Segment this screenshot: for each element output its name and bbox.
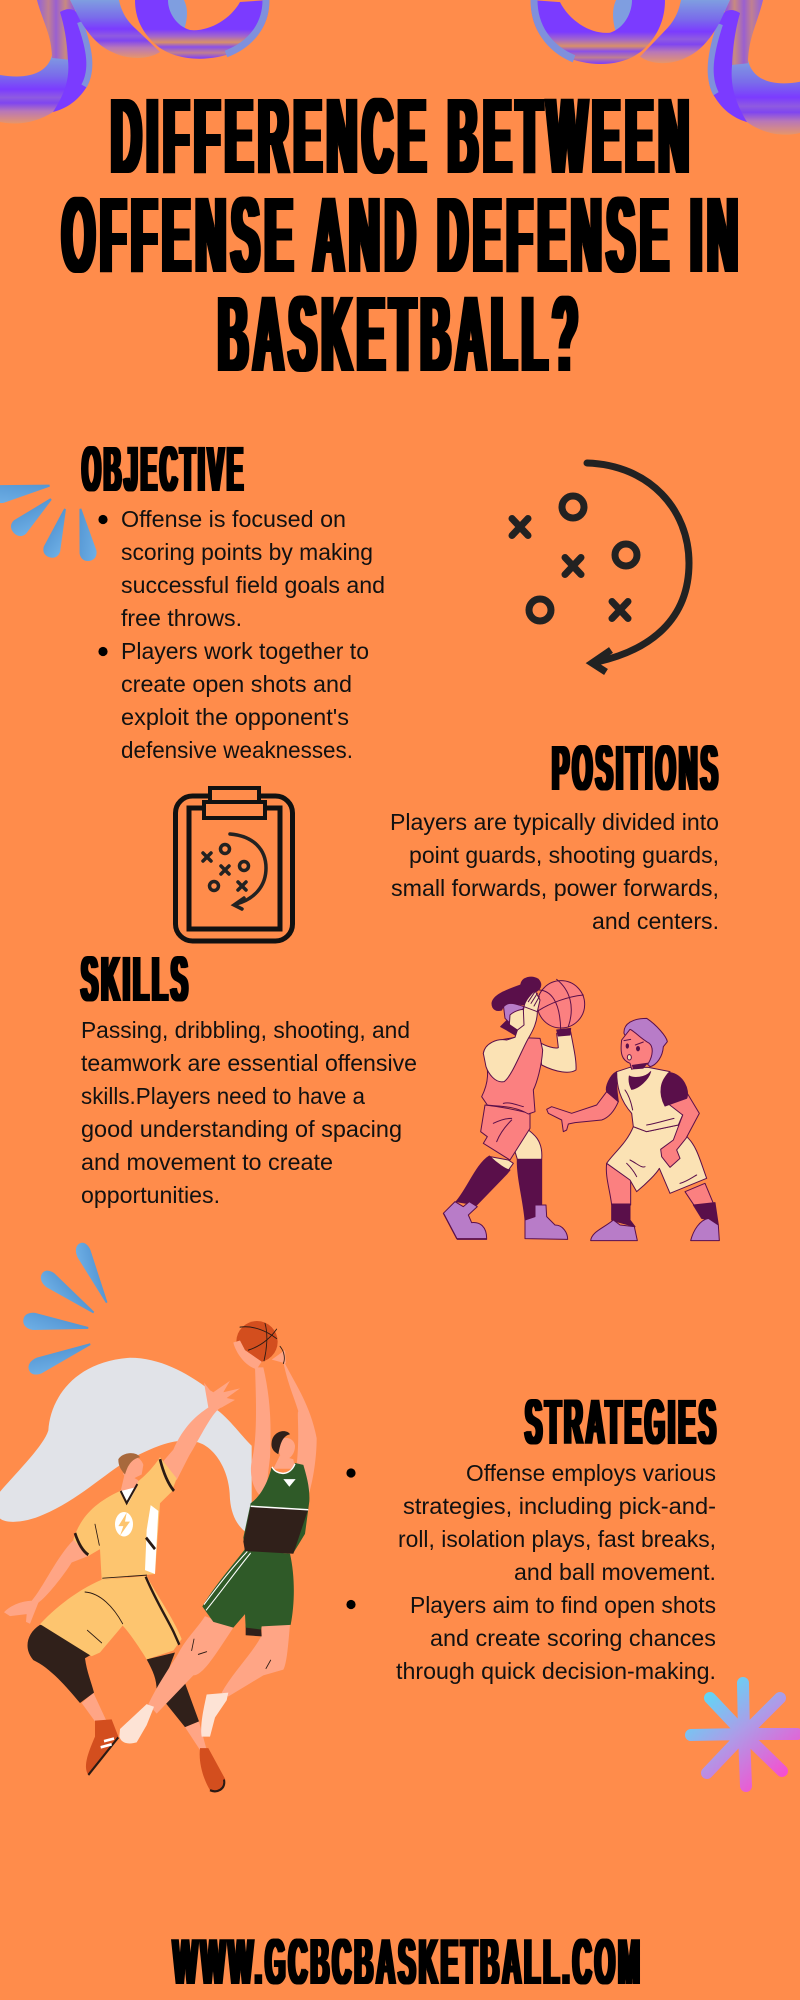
text: strategies bullets: Players aim to find open shots: [410, 1592, 716, 1618]
text: positions: Players are typically divided into: [390, 809, 719, 835]
icon: gradient asterisk: [691, 1683, 797, 1786]
green player: [119, 1321, 317, 1743]
icon: clipboard: [176, 788, 292, 941]
icon: blue rays upper left of dunk scene: [23, 1240, 113, 1378]
shorts and shirt: [481, 1037, 543, 1160]
grey blob: [0, 1358, 252, 1536]
yellow player: [4, 1381, 240, 1792]
text: positions: [390, 809, 719, 934]
text: strategies bullets: strategies, including pick-and-: [403, 1493, 716, 1519]
icon: play diagram: [512, 463, 689, 672]
text: strategies bullets: through quick decision-making.: [396, 1658, 716, 1684]
text: skills: opportunities.: [81, 1182, 220, 1208]
text: objective bullets: defensive weaknesses.: [121, 737, 353, 763]
text: skills: [81, 1017, 417, 1208]
front arm and head: [483, 977, 541, 1082]
text: skills: teamwork are essential offensive: [81, 1050, 417, 1076]
text: objective bullets: scoring points by making: [121, 539, 373, 565]
back sock and shoe: [443, 1156, 513, 1239]
text: strategies bullets: and create scoring chances: [430, 1625, 716, 1651]
text: skills: Passing, dribbling, shooting, and: [81, 1017, 410, 1043]
text: objective bullets: exploit the opponent's: [121, 704, 349, 730]
text: skills: skills.Players need to have a: [81, 1083, 365, 1109]
illustration: two players jumping: [0, 1321, 317, 1792]
text: strategies bullets: and ball movement.: [514, 1559, 716, 1585]
title: [62, 76, 743, 394]
text: objective bullets: successful field goals and: [121, 572, 385, 598]
defender torso and arms: [547, 1067, 699, 1167]
text: positions: point guards, shooting guards,: [409, 842, 719, 868]
text: positions: and centers.: [592, 908, 719, 934]
text: skills: and movement to create: [81, 1149, 333, 1175]
decoration: top-left ribbon: [0, 0, 269, 124]
text: skills: good understanding of spacing: [81, 1116, 402, 1142]
icon: blue rays near objective: [0, 477, 98, 562]
back arm and ball: [537, 979, 585, 1072]
text: objective bullets: [98, 506, 385, 763]
text: OBJECTIVE: [82, 433, 246, 505]
front leg: [515, 1127, 568, 1239]
text: objective bullets: Offense is focused on: [121, 506, 346, 532]
decoration: top-right ribbon: [531, 0, 800, 135]
defender head: [621, 1018, 667, 1069]
illustration: two players with ball: [443, 977, 719, 1241]
text: positions: small forwards, power forwards,: [391, 875, 719, 901]
defender legs: [591, 1125, 719, 1241]
text: SKILLS: [81, 943, 191, 1015]
text: strategies bullets: Offense employs various: [466, 1460, 716, 1486]
text: strategies bullets: roll, isolation plays, fast breaks,: [398, 1526, 716, 1552]
text: objective bullets: free throws.: [121, 605, 242, 631]
text: objective bullets: create open shots and: [121, 671, 352, 697]
text: strategies bullets: [346, 1460, 716, 1684]
text: objective bullets: Players work together to: [121, 638, 369, 664]
